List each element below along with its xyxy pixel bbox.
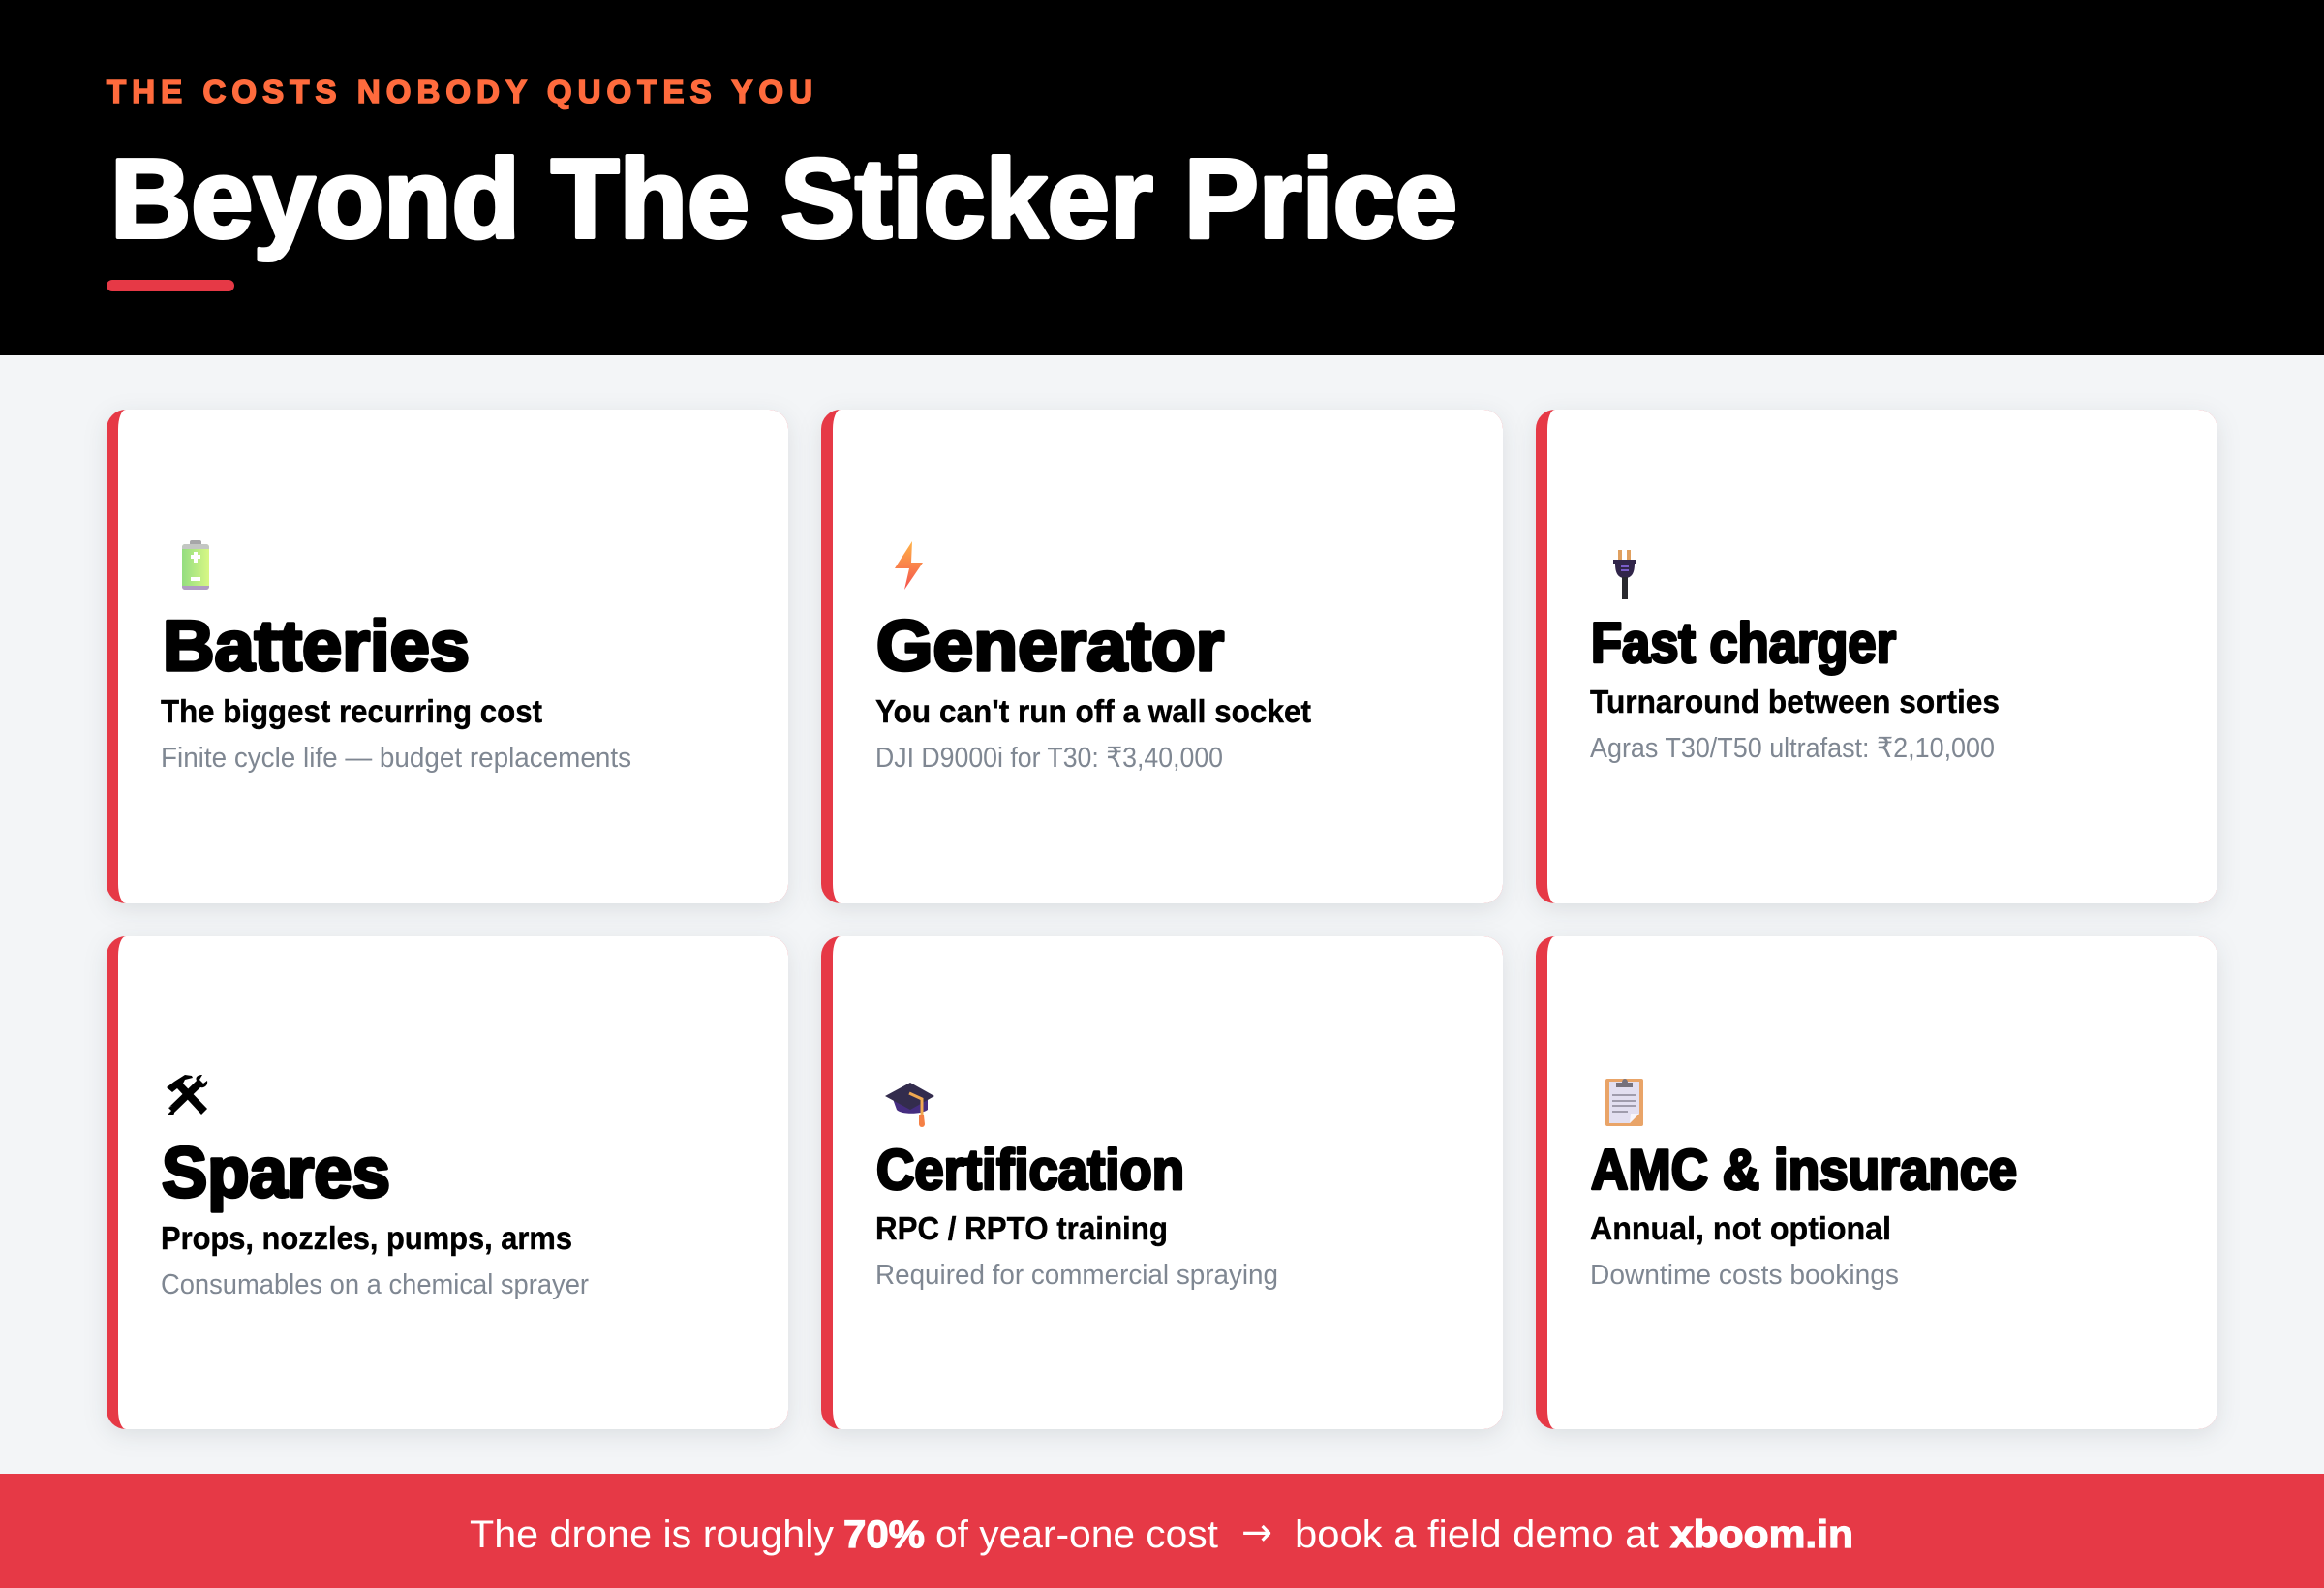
heading: Generator <box>876 607 1224 686</box>
panel: generator <box>821 410 1503 903</box>
heading: Spares <box>162 1134 390 1212</box>
icon: clipboard <box>1605 1079 1643 1126</box>
icon: hammer and wrench <box>167 1075 207 1115</box>
footer banner <box>0 1474 2324 1588</box>
icon: graduation cap <box>885 1083 934 1127</box>
title: Beyond The Sticker Price <box>110 136 1457 261</box>
heading: AMC & insurance <box>1591 1139 2017 1202</box>
subtitle: RPC / RPTO training <box>875 1210 1168 1246</box>
heading: Fast charger <box>1591 612 1896 675</box>
description: Required for commercial spraying <box>875 1260 1278 1291</box>
panel: amc and insurance <box>1536 936 2217 1429</box>
subtitle: You can't run off a wall socket <box>875 693 1311 729</box>
footer text: xboom.in <box>1670 1513 1853 1556</box>
footer text: The drone is roughly <box>470 1513 834 1556</box>
icon: lightning bolt <box>895 541 923 590</box>
icon: battery <box>182 540 209 590</box>
header band <box>0 0 2324 355</box>
eyebrow: THE COSTS NOBODY QUOTES YOU <box>107 74 812 109</box>
footer text: 70% <box>843 1513 925 1556</box>
panel: spares <box>107 936 788 1429</box>
footer text: of year-one cost <box>935 1513 1218 1556</box>
description: Finite cycle life — budget replacements <box>161 743 631 774</box>
heading: Batteries <box>163 607 470 686</box>
heading: Certification <box>876 1139 1184 1202</box>
panel: batteries <box>107 410 788 903</box>
subtitle: Props, nozzles, pumps, arms <box>161 1220 572 1256</box>
panel: certification <box>821 936 1503 1429</box>
description: Downtime costs bookings <box>1590 1260 1899 1291</box>
description: Agras T30/T50 ultrafast: ₹2,10,000 <box>1590 733 1995 764</box>
subtitle: Turnaround between sorties <box>1590 684 2000 719</box>
description: Consumables on a chemical sprayer <box>161 1269 589 1300</box>
subtitle: Annual, not optional <box>1590 1210 1891 1246</box>
subtitle: The biggest recurring cost <box>161 693 542 729</box>
icon: plug <box>1613 550 1636 599</box>
footer text: book a field demo at <box>1295 1513 1659 1556</box>
footer text <box>470 1511 1853 1556</box>
footer text: → <box>1241 1511 1272 1555</box>
title underline <box>107 280 234 291</box>
description: DJI D9000i for T30: ₹3,40,000 <box>875 743 1223 774</box>
panel: fast charger <box>1536 410 2217 903</box>
